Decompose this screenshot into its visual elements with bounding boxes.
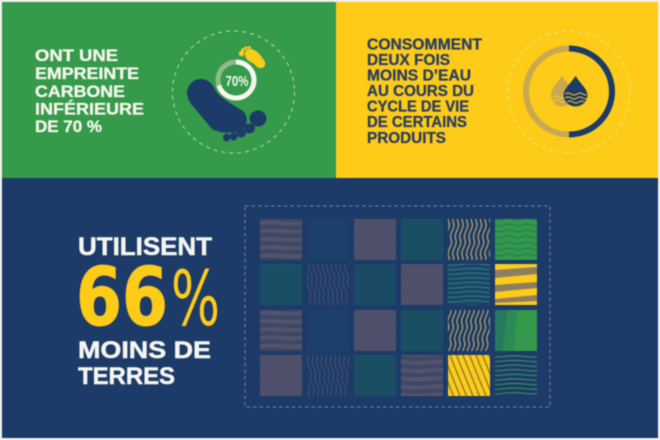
text: water statement: PRODUITS <box>367 130 446 147</box>
icon: water drops with half ring <box>508 31 630 153</box>
text: land use statement: % <box>171 254 220 343</box>
text: carbon footprint statement: ONT UNE <box>35 47 118 65</box>
text: carbon footprint statement <box>35 47 144 136</box>
text: land use statement: MOINS DE <box>78 337 211 364</box>
text: land use statement: 66 <box>76 251 168 344</box>
text: land use statement: UTILISENT <box>78 233 212 261</box>
icon: footprints with 70% ring: 70% <box>226 73 248 90</box>
text: carbon footprint statement: INFÉRIEURE <box>35 100 144 118</box>
text: water statement: DEUX FOIS <box>367 52 450 69</box>
text: carbon footprint statement: EMPREINTE <box>35 65 139 83</box>
icon: footprints with 70% ring <box>172 31 294 153</box>
text: water statement: DE CERTAINS <box>367 114 467 131</box>
text: carbon footprint statement: DE 70 % <box>35 118 102 136</box>
chart: patterned land squares <box>245 206 550 407</box>
text: land use statement <box>76 233 220 390</box>
panel: water use <box>336 2 658 178</box>
text: water statement <box>367 36 483 147</box>
text: water statement: CONSOMMENT <box>367 36 483 54</box>
text: water statement: CYCLE DE VIE <box>367 98 469 116</box>
text: carbon footprint statement: CARBONE <box>35 83 125 101</box>
panel: land use <box>2 178 658 438</box>
panel: carbon footprint <box>2 2 336 178</box>
text: land use statement: TERRES <box>78 363 175 390</box>
text: water statement: AU COURS DU <box>367 83 474 100</box>
text: water statement: MOINS D’EAU <box>367 68 471 84</box>
